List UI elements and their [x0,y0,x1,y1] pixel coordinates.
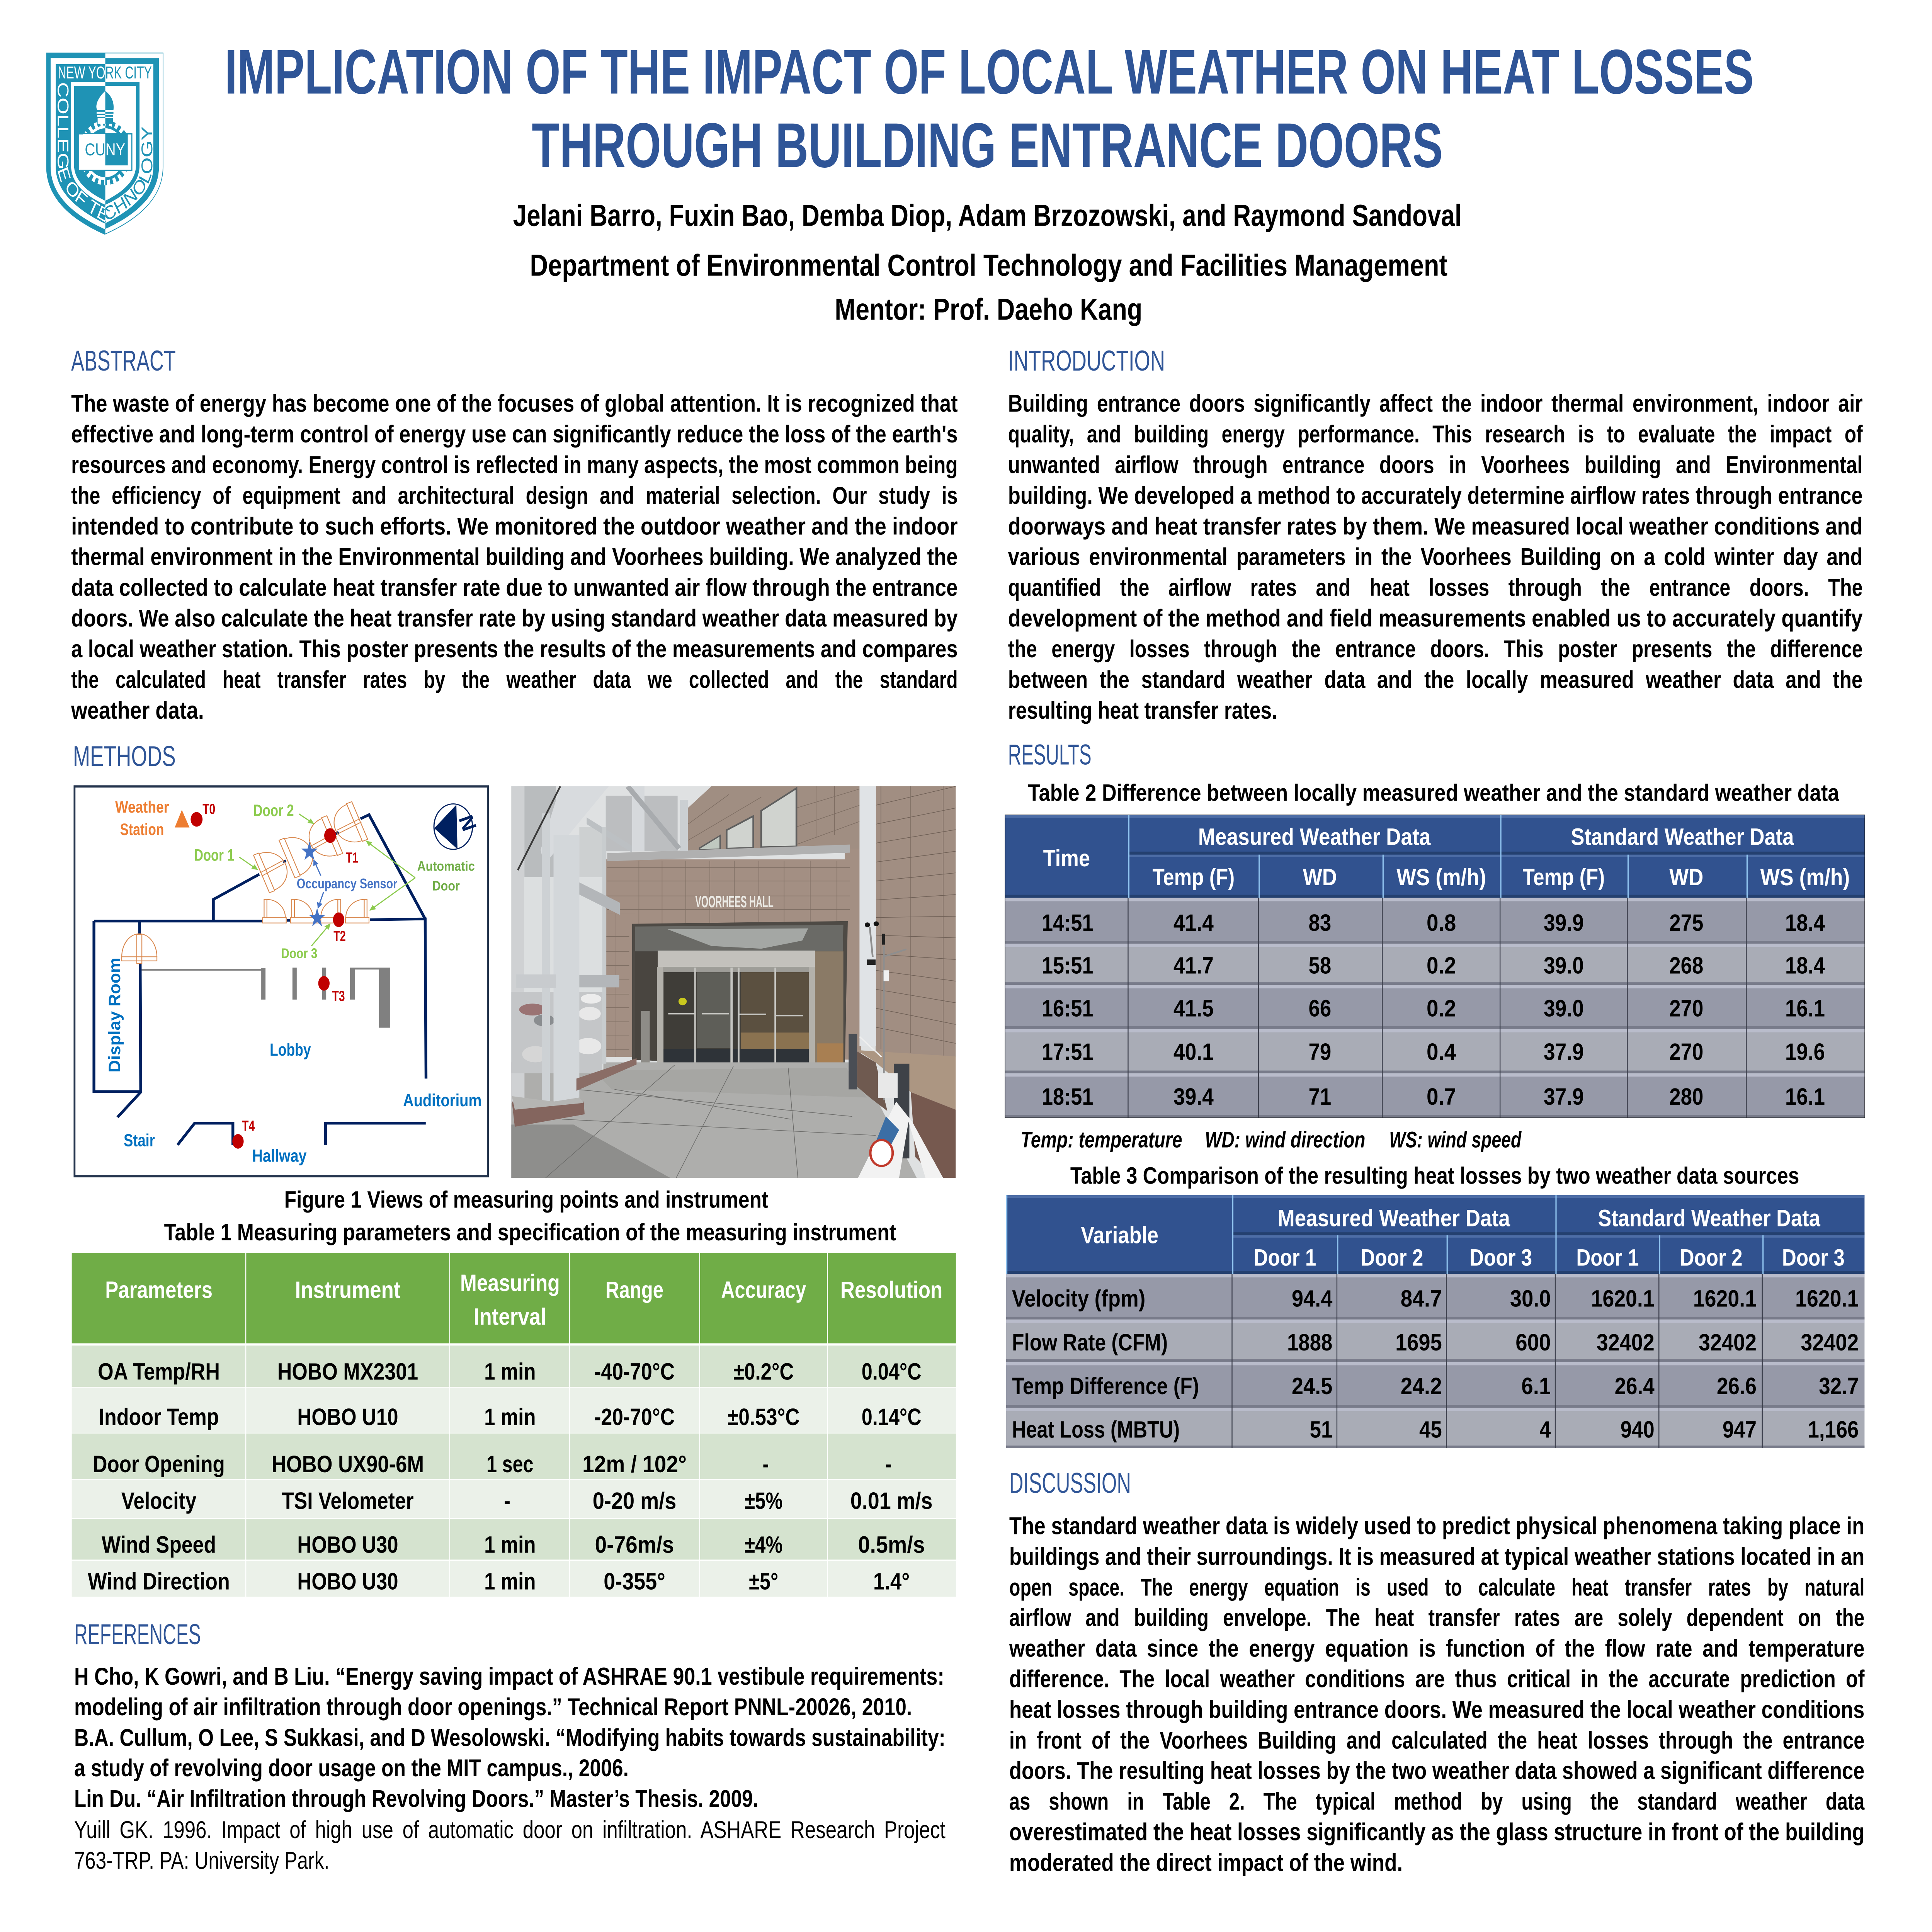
table 1: measuring parameters: 1 min [484,1532,536,1558]
table 3: heat loss comparison: 1620.1 [1693,1285,1757,1312]
photo: Voorhees Hall entrance with weather station [511,786,956,1178]
text block: abstract: intended to contribute to such efforts. We monitored the outdoor weather and the indoor [71,513,958,540]
table 3: heat loss comparison: Standard Weather Data [1598,1205,1821,1231]
text block: introduction: between the standard weather data and the locally measured weather data and the [1008,666,1863,694]
table 3: heat loss comparison: 26.6 [1717,1373,1757,1399]
text block: introduction: unwanted airflow through entrance doors in Voorhees building and Environmental [1008,451,1863,479]
table 1: measuring parameters: Wind Speed [102,1532,216,1558]
table 1: measuring parameters: Wind Direction [88,1568,230,1595]
table 3: heat loss comparison: 947 [1723,1417,1757,1443]
authors and affiliation: Jelani Barro, Fuxin Bao, Demba Diop, Adam Brzozowski, and Raymond Sandoval [513,199,1462,233]
table 1: measuring parameters: OA Temp/RH [98,1359,220,1385]
table 1: measuring parameters: 0-20 m/s [593,1488,676,1514]
heading: introduction: INTRODUCTION [1008,345,1165,377]
table 1: measuring parameters: 1 min [484,1404,536,1430]
table 1: measuring parameters: - [885,1451,891,1477]
text block: introduction: building. We developed a method to accurately determine airflow rates through entrance [1008,482,1863,509]
table 2: weather data comparison: 268 [1669,952,1703,979]
logo: New York City College of Technology shield: CUNY [85,140,125,159]
caption: table 1: Table 1 Measuring parameters and specification of the measuring instrument [164,1219,896,1245]
legend: table 2 abbreviations: WS: wind speed [1389,1128,1522,1153]
floor plan diagram: T0 [202,801,215,817]
table 2: weather data comparison: 39.4 [1173,1083,1214,1110]
table 1: measuring parameters: HOBO U30 [297,1532,398,1558]
table 2: weather data comparison: 0.8 [1427,910,1456,936]
text block: introduction: the energy losses through the entrance doors. This poster presents the difference [1008,636,1863,663]
table 1: measuring parameters: 1 min [484,1359,536,1385]
table 3: heat loss comparison: 94.4 [1292,1285,1333,1312]
table 3: heat loss comparison: Temp Difference (F) [1012,1373,1199,1399]
table 1: measuring parameters: Interval [474,1303,546,1330]
table 2: weather data comparison: 83 [1309,910,1331,936]
floor plan diagram: Door 3 [281,946,317,961]
table 1: measuring parameters: - [763,1451,769,1477]
table 2: weather data comparison: 79 [1309,1039,1331,1065]
table 1: measuring parameters: ±0.2°C [733,1359,794,1385]
table 1: measuring parameters: ±4% [745,1532,782,1558]
table 1: measuring parameters: -20-70°C [594,1404,675,1430]
table 3: heat loss comparison: 1888 [1287,1329,1332,1355]
text block: abstract: the calculated heat transfer rates by the weather data we collected and the standard [71,666,958,694]
text block: references: H Cho, K Gowri, and B Liu. “Energy saving impact of ASHRAE 90.1 vestibule requirements: [74,1663,944,1690]
table 2: weather data comparison: WS (m/h) [1760,864,1850,890]
table 3: heat loss comparison: Door 3 [1782,1245,1845,1271]
table 1: measuring parameters: 0.01 m/s [850,1488,932,1514]
table 1: measuring parameters: 12m / 102° [582,1451,687,1477]
text block: references: a study of revolving door usage on the MIT campus., 2006. [74,1755,629,1782]
text block: discussion: buildings and their surroundings. It is measured at typical weather stations located in an [1009,1543,1864,1570]
table 1: measuring parameters: 1 sec [486,1451,534,1477]
table 2: weather data comparison: 280 [1669,1083,1703,1110]
table 1: measuring parameters: Instrument [295,1277,401,1303]
table 1: measuring parameters: 0.04°C [862,1359,922,1385]
logo: New York City College of Technology shield: NEW YORK CITY [58,63,152,82]
table 1: measuring parameters: Accuracy [721,1277,806,1303]
text block: discussion: open space. The energy equation is used to calculate heat transfer rates by natural [1009,1574,1864,1601]
table 1: measuring parameters: HOBO U30 [297,1568,398,1595]
table 2: weather data comparison: 0.2 [1427,995,1456,1022]
table 3: heat loss comparison: Measured Weather Data [1277,1205,1510,1231]
table 3: heat loss comparison: 4 [1539,1417,1551,1443]
table 2: weather data comparison [1005,815,1864,1117]
floor plan diagram: Hallway [252,1146,307,1165]
table 2: weather data comparison: 16.1 [1785,995,1825,1022]
table 2: weather data comparison: 41.4 [1173,910,1214,936]
text block: abstract: effective and long-term control of energy use can significantly reduce the loss of the earth's [71,421,958,448]
heading: results: RESULTS [1008,739,1092,771]
text block: abstract: data collected to calculate heat transfer rate due to unwanted air flow through the entrance [71,574,958,601]
text block: introduction: development of the method and field measurements enabled us to accurately quantify [1008,605,1863,632]
text block: references: 763-TRP. PA: University Park. [74,1847,329,1874]
text block: references: Lin Du. “Air Infiltration through Revolving Doors.” Master’s Thesis. 2009. [74,1785,759,1813]
table 3: heat loss comparison: 1620.1 [1795,1285,1859,1312]
table 3: heat loss comparison: 32402 [1699,1329,1757,1355]
table 3: heat loss comparison: 26.4 [1615,1373,1655,1399]
table 2: weather data comparison: 18.4 [1785,952,1825,979]
text block: references: Yuill GK. 1996. Impact of high use of automatic door on infiltration. ASHARE Research Project [74,1816,946,1844]
table 3: heat loss comparison: 1620.1 [1591,1285,1655,1312]
table 3: heat loss comparison: Flow Rate (CFM) [1012,1329,1168,1355]
caption: table 2: Table 2 Difference between locally measured weather and the standard weather data [1028,780,1840,806]
table 1: measuring parameters: Velocity [121,1488,197,1514]
table 1: measuring parameters: HOBO U10 [297,1404,398,1430]
floor plan diagram: Door 1 [194,846,234,864]
logo: New York City College of Technology shield: COLLEGE OF TECHNOLOGY [54,82,156,227]
table 2: weather data comparison: 275 [1669,910,1703,936]
table 1: measuring parameters: 1 min [484,1568,536,1595]
text block: references [74,1663,946,1874]
table 3: heat loss comparison: Variable [1081,1222,1158,1248]
table 2: weather data comparison: 270 [1669,1039,1703,1065]
table 3: heat loss comparison: 600 [1515,1329,1551,1355]
authors and affiliation: Department of Environmental Control Technology and Facilities Management [530,248,1447,282]
heading: methods: METHODS [73,740,176,772]
text block: introduction [1008,390,1863,724]
text block: discussion: as shown in Table 2. The typical method by using the standard weather data [1009,1788,1865,1815]
heading: discussion: DISCUSSION [1009,1468,1131,1499]
text block: discussion: doors. The resulting heat losses by the two weather data showed a significant difference [1009,1757,1864,1784]
text block: abstract: doors. We also calculate the heat transfer rate by using standard weather data measured by [71,605,958,632]
table 1: measuring parameters: Measuring [460,1270,560,1296]
floor plan diagram: Display Room [105,957,124,1072]
table 1: measuring parameters: 0.14°C [862,1404,922,1430]
table 3: heat loss comparison: Door 2 [1361,1245,1423,1271]
table 1: measuring parameters: HOBO MX2301 [277,1359,418,1385]
table 3: heat loss comparison: 32402 [1801,1329,1859,1355]
legend: table 2 abbreviations: WD: wind direction [1205,1128,1365,1153]
table 2: weather data comparison: 0.4 [1427,1039,1456,1065]
table 1: measuring parameters: Door Opening [93,1451,225,1477]
table 2: weather data comparison: 15:51 [1042,952,1093,979]
table 1: measuring parameters: - [504,1488,510,1514]
logo: New York City College of Technology shield [46,53,163,234]
text block: discussion: airflow and building envelope. The heat transfer rates are solely dependent on the [1009,1604,1864,1631]
text block: references: modeling of air infiltration through door openings.” Technical Report PNNL-20026, 2010. [74,1694,912,1721]
table 2: weather data comparison: Standard Weather Data [1571,823,1794,850]
text block: abstract: The waste of energy has become one of the focuses of global attention. It is recognized that [71,390,958,417]
title: THROUGH BUILDING ENTRANCE DOORS [532,110,1443,181]
table 2: weather data comparison: 41.5 [1173,995,1214,1022]
text block: abstract: a local weather station. This poster presents the results of the measurements and compares [71,636,958,663]
text block: abstract: thermal environment in the Environmental building and Voorhees building. We analyzed the [71,544,958,571]
text block: discussion: heat losses through building entrance doors. We measured the local weather conditions [1009,1696,1864,1723]
text block: abstract [71,390,958,724]
table 1: measuring parameters: ±5% [745,1488,782,1514]
table 1: measuring parameters: ±0.53°C [728,1404,799,1430]
floor plan diagram: T3 [332,988,345,1004]
table 1: measuring parameters: HOBO UX90-6M [272,1451,424,1477]
table 1: measuring parameters: 0.5m/s [858,1532,925,1558]
text block: introduction: quantified the airflow rates and heat losses through the entrance doors. The [1008,574,1863,601]
floor plan diagram: Weather [115,798,169,816]
floor plan diagram: Occupancy Sensor [297,876,397,891]
table 2: weather data comparison: Temp (F) [1522,864,1605,890]
text block: introduction: doorways and heat transfer rates by them. We measured local weather conditions and [1008,513,1863,540]
table 2: weather data comparison: 37.9 [1544,1039,1584,1065]
floor plan diagram: Automatic [417,859,475,874]
floor plan diagram: Stair [124,1130,155,1150]
text block: discussion: moderated the direct impact of the wind. [1009,1849,1403,1876]
table 2: weather data comparison: 16.1 [1785,1083,1825,1110]
table 3: heat loss comparison: 6.1 [1521,1373,1551,1399]
text block: discussion: overestimated the heat losses significantly as the glass structure in front of the building [1009,1819,1864,1846]
title: IMPLICATION OF THE IMPACT OF LOCAL WEATHER ON HEAT LOSSES [225,36,1754,107]
text block: discussion: weather data since the energy equation is function of the flow rate and temperature [1009,1635,1864,1662]
table 3: heat loss comparison: Door 1 [1576,1245,1639,1271]
table 3: heat loss comparison: 1695 [1395,1329,1442,1355]
table 1: measuring parameters [72,1253,956,1597]
table 3: heat loss comparison: 24.2 [1401,1373,1442,1399]
title [225,36,1754,181]
floor plan diagram: Door 2 [253,801,294,820]
floor plan diagram: T2 [333,928,346,944]
text block: discussion [1009,1513,1865,1876]
table 1: measuring parameters: Parameters [105,1277,213,1303]
table 3: heat loss comparison: 940 [1621,1417,1655,1443]
table 3: heat loss comparison: 51 [1310,1417,1332,1443]
table 2: weather data comparison: 19.6 [1785,1039,1825,1065]
text block: abstract: weather data. [71,697,204,724]
table 2: weather data comparison: WS (m/h) [1396,864,1486,890]
floor plan diagram: Lobby [270,1040,311,1060]
table 3: heat loss comparison: 32402 [1597,1329,1655,1355]
authors and affiliation [513,199,1462,327]
floor plan diagram: Station [120,820,164,839]
table 3: heat loss comparison: 32.7 [1819,1373,1859,1399]
text block: introduction: various environmental parameters in the Voorhees Building on a cold winter day and [1008,544,1863,571]
floor plan diagram: N [454,812,481,834]
table 2: weather data comparison: 39.9 [1544,910,1584,936]
table 2: weather data comparison: 39.0 [1544,952,1584,979]
table 2: weather data comparison: 0.2 [1427,952,1456,979]
table 2: weather data comparison: WD [1303,864,1337,890]
table 2: weather data comparison: 16:51 [1042,995,1093,1022]
table 2: weather data comparison: Temp (F) [1153,864,1235,890]
table 3: heat loss comparison: Heat Loss (MBTU) [1012,1417,1180,1443]
table 2: weather data comparison: WD [1669,864,1703,890]
table 2: weather data comparison: 58 [1309,952,1331,979]
table 2: weather data comparison: 14:51 [1042,910,1093,936]
table 2: weather data comparison: 66 [1309,995,1331,1022]
table 2: weather data comparison: 40.1 [1173,1039,1214,1065]
table 3: heat loss comparison: Velocity (fpm) [1012,1285,1145,1312]
text block: discussion: in front of the Voorhees Building and calculated the heat losses through the entrance [1009,1727,1864,1754]
floor plan diagram: Auditorium [403,1090,481,1110]
table 2: weather data comparison: 17:51 [1042,1039,1093,1065]
table 1: measuring parameters: 1.4° [873,1568,910,1595]
table 2: weather data comparison: 18.4 [1785,910,1825,936]
text block: discussion: difference. The local weather conditions are thus critical in the accurate prediction of [1009,1666,1865,1693]
table 2: weather data comparison: Measured Weather Data [1198,823,1431,850]
table 2: weather data comparison: 18:51 [1042,1083,1093,1110]
table 1: measuring parameters: 0-76m/s [595,1532,674,1558]
floor plan diagram: Door [432,878,460,893]
table 2: weather data comparison: 0.7 [1427,1083,1456,1110]
table 3: heat loss comparison: 30.0 [1510,1285,1551,1312]
text block: introduction: Building entrance doors significantly affect the indoor thermal environment, indoor air [1008,390,1863,417]
table 1: measuring parameters: Resolution [840,1277,942,1303]
table 2: weather data comparison: 39.0 [1544,995,1584,1022]
table 3: heat loss comparison: 84.7 [1401,1285,1442,1312]
table 3: heat loss comparison: Door 1 [1253,1245,1316,1271]
table 3: heat loss comparison: 24.5 [1292,1373,1332,1399]
legend: table 2 abbreviations [1020,1128,1522,1153]
table 2: weather data comparison: 71 [1309,1083,1331,1110]
table 3: heat loss comparison: 1,166 [1808,1417,1859,1443]
floor plan diagram [75,786,488,1176]
table 3: heat loss comparison: 45 [1419,1417,1442,1443]
floor plan diagram: T1 [346,850,358,866]
text block: introduction: resulting heat transfer rates. [1008,697,1277,724]
table 1: measuring parameters: -40-70°C [594,1359,675,1385]
table 3: heat loss comparison [1006,1195,1864,1448]
table 1: measuring parameters: Indoor Temp [99,1404,219,1430]
table 1: measuring parameters: Range [605,1277,663,1303]
text block: discussion: The standard weather data is widely used to predict physical phenomena taking place in [1009,1513,1864,1540]
table 2: weather data comparison: Time [1043,845,1090,871]
heading: abstract: ABSTRACT [71,345,176,377]
table 1: measuring parameters: TSI Velometer [282,1488,414,1514]
text block: abstract: resources and economy. Energy control is reflected in many aspects, the most common being [71,451,958,479]
table 3: heat loss comparison: Door 3 [1469,1245,1532,1271]
text block: references: B.A. Cullum, O Lee, S Sukkasi, and D Wesolowski. “Modifying habits towards sustainability: [74,1725,946,1752]
floor plan diagram: T4 [242,1118,255,1134]
photo: Voorhees Hall entrance with weather station: VOORHEES HALL [695,893,774,911]
table 2: weather data comparison: 41.7 [1173,952,1214,979]
text block: abstract: the efficiency of equipment and architectural design and material selection. Our study is [71,482,958,509]
table 2: weather data comparison: 270 [1669,995,1703,1022]
authors and affiliation: Mentor: Prof. Daeho Kang [835,293,1142,327]
table 2: weather data comparison: 37.9 [1544,1083,1584,1110]
text block: introduction: quality, and building energy performance. This research is to evaluate the impact of [1008,421,1863,448]
legend: table 2 abbreviations: Temp: temperature [1020,1128,1182,1153]
heading: references: REFERENCES [74,1619,201,1650]
caption: figure 1: Figure 1 Views of measuring points and instrument [284,1187,768,1213]
table 3: heat loss comparison: Door 2 [1680,1245,1743,1271]
table 1: measuring parameters: ±5° [749,1568,778,1595]
table 1: measuring parameters: 0-355° [604,1568,665,1595]
caption: table 3: Table 3 Comparison of the resulting heat losses by two weather data sources [1070,1163,1799,1189]
